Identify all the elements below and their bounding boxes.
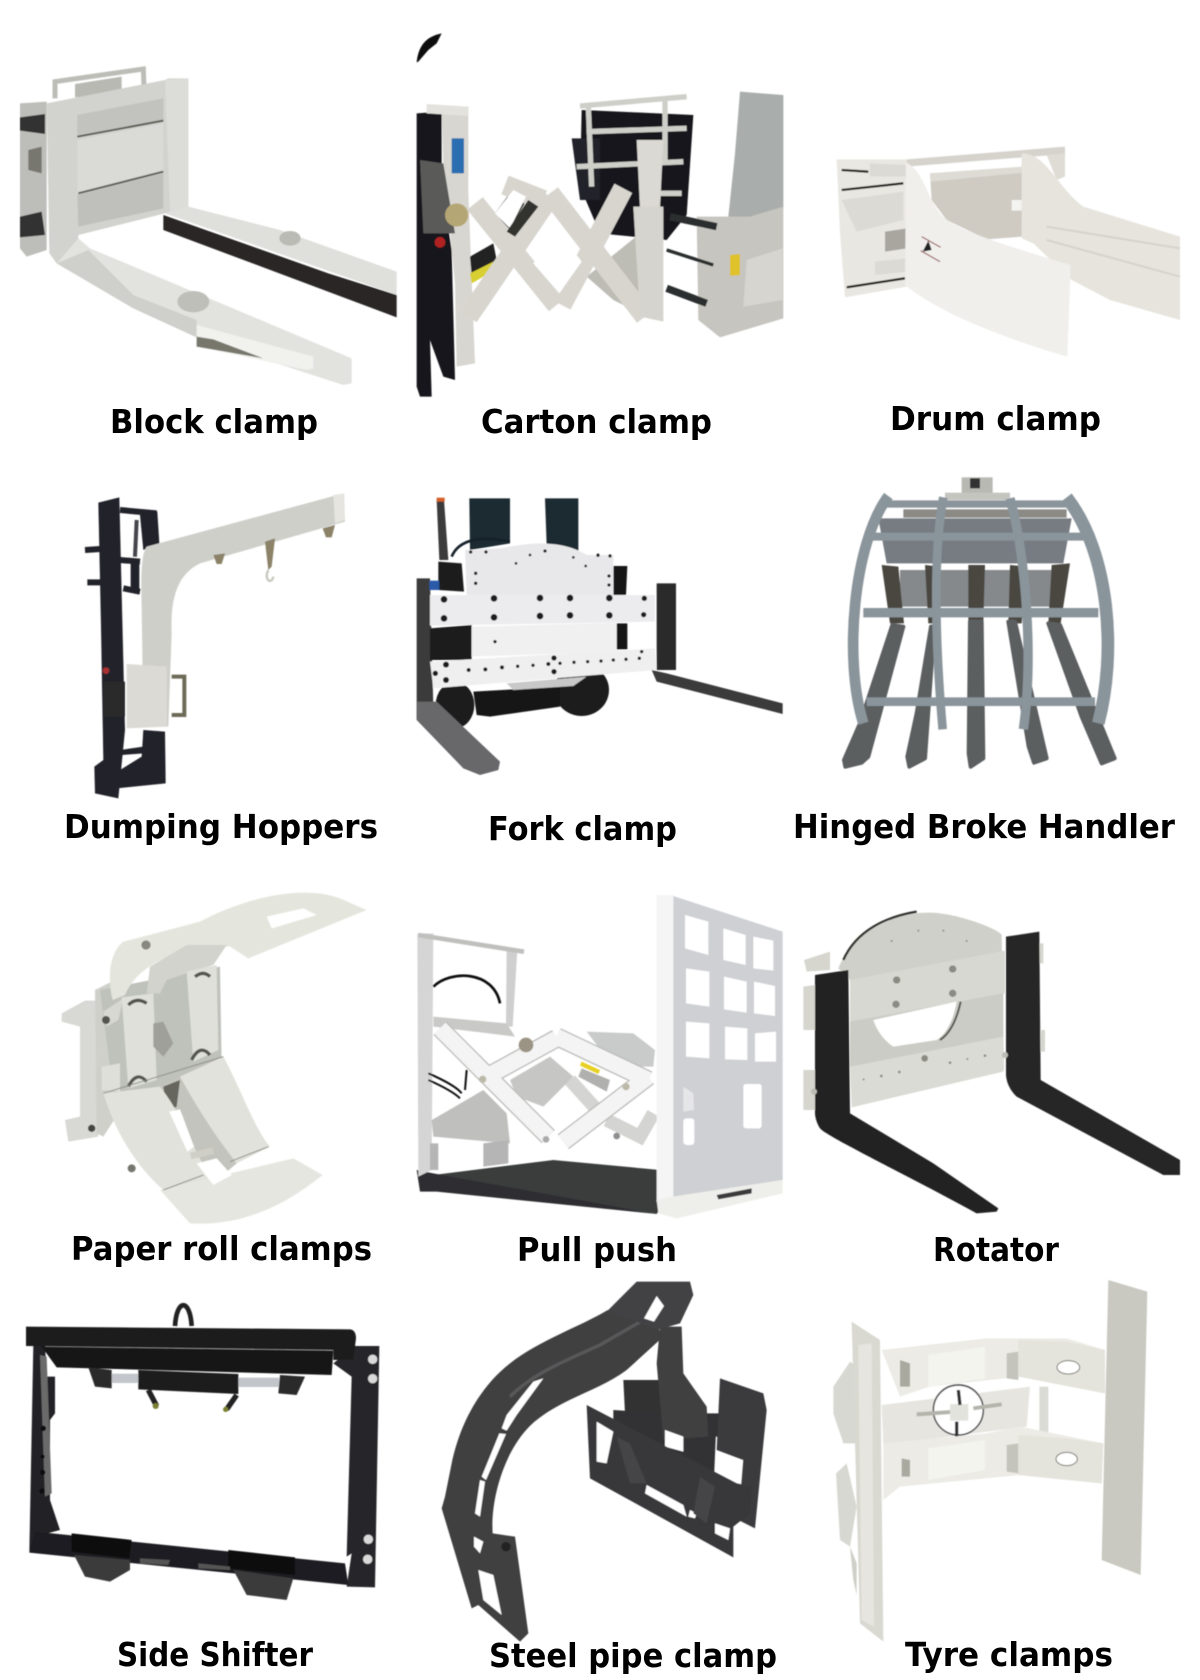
icon: dumping hopper [85,493,345,798]
label: Carton clamp: Carton clamp [481,402,712,441]
label: Pull push: Pull push [517,1230,677,1269]
icon: hinged broke handler [844,477,1115,767]
icon: fork clamp [417,498,783,775]
icon: side shifter [26,1305,379,1600]
panel: Block clamp [20,69,397,441]
icon: carton clamp [417,33,783,397]
label: Dumping Hoppers: Dumping Hoppers [64,807,378,846]
label: Hinged Broke Handler: Hinged Broke Handler [793,807,1176,846]
label: Steel pipe clamp: Steel pipe clamp [489,1636,777,1675]
panel: Rotator [803,912,1180,1269]
icon: drum clamp [837,147,1180,357]
panel: Dumping Hoppers [64,493,378,846]
panel: Drum clamp [837,147,1180,438]
label: Fork clamp: Fork clamp [488,809,677,848]
label: Rotator: Rotator [933,1230,1060,1269]
icon: block clamp [20,69,397,385]
panel: Steel pipe clamp [442,1282,777,1675]
panel: Side Shifter [26,1305,379,1674]
panel: Hinged Broke Handler [793,477,1176,846]
label: Tyre clamps: Tyre clamps [905,1635,1113,1674]
icon: pull push [417,895,783,1218]
icon: steel pipe clamp [442,1282,767,1642]
panel: Paper roll clamps [62,893,372,1268]
icon: rotator [803,912,1180,1213]
icon: tyre clamp [833,1280,1147,1642]
panel: Pull push [417,895,783,1269]
label: Side Shifter: Side Shifter [117,1635,314,1674]
panel: Tyre clamps [833,1280,1147,1674]
panel: Carton clamp [417,33,783,441]
label: Paper roll clamps: Paper roll clamps [71,1229,372,1268]
label: Block clamp: Block clamp [110,402,318,441]
label: Drum clamp: Drum clamp [890,399,1101,438]
panel: Fork clamp [417,498,783,848]
icon: paper roll clamp [62,893,367,1224]
